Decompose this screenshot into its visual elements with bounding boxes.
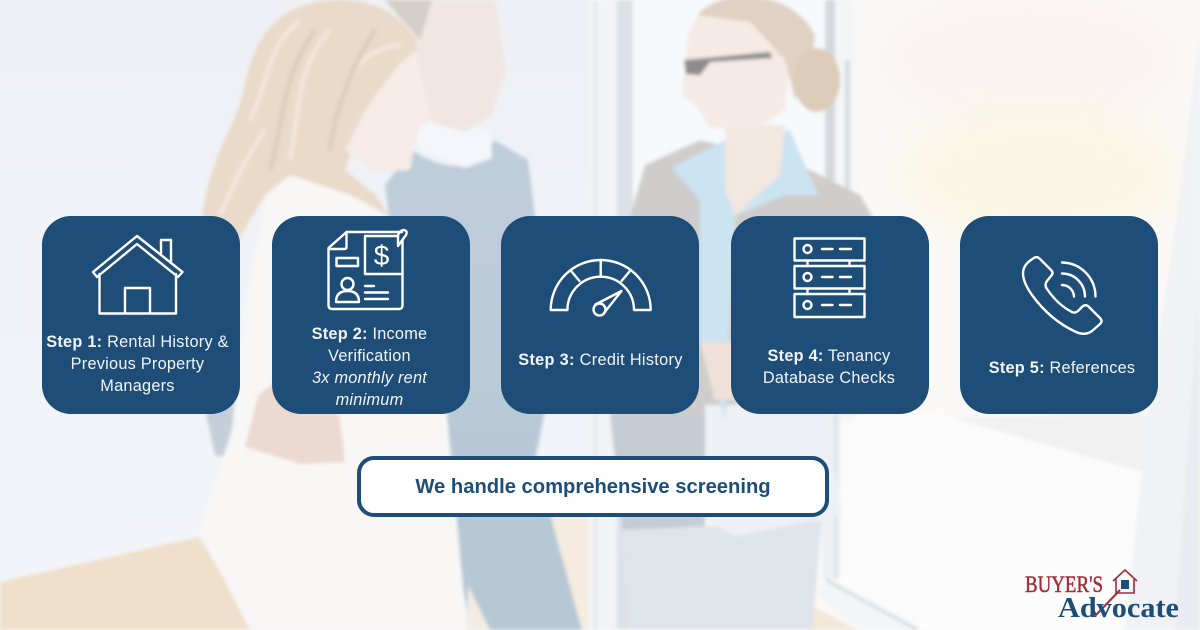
logo window and check: [1091, 580, 1129, 615]
icon: credit gauge: [550, 258, 652, 317]
card: step 5: [960, 216, 1158, 414]
icon: telephone: [1022, 256, 1103, 335]
step 3 label: Step 3: Credit History: [518, 351, 683, 369]
card: step 1: [42, 216, 240, 414]
step 5 label: Step 5: References: [989, 359, 1135, 377]
card: step 3: [501, 216, 699, 414]
man: [385, 140, 545, 470]
icon: house: [92, 234, 184, 315]
floor and balcony: [0, 537, 255, 630]
icon: database server: [793, 237, 866, 318]
step 1 label: Previous Property: [71, 355, 204, 373]
step 4 label: [763, 347, 895, 387]
step 1 label: Managers: [100, 377, 175, 395]
agent: [610, 140, 872, 420]
step 1 label: Step 1: Rental History &: [46, 333, 229, 351]
logo house mark: [1113, 570, 1137, 593]
card: step 2: [272, 216, 470, 414]
icon: income document: [327, 228, 408, 310]
step 2 label: Step 2: Income: [312, 325, 427, 343]
logo: Buyer's Advocate: [1025, 569, 1179, 620]
step 4 label: Database Checks: [763, 369, 895, 387]
callout: [357, 456, 829, 517]
step 1 label: [46, 333, 229, 395]
step 2 label: [312, 325, 428, 409]
step 2 label: minimum: [336, 391, 403, 409]
step 2 label: Verification: [328, 347, 411, 365]
step 4 label: Step 4: Tenancy: [768, 347, 890, 365]
dollar sign: $: [374, 240, 390, 271]
step 2 label: 3x monthly rent: [312, 369, 427, 387]
card: step 4: [731, 216, 929, 414]
callout: We handle comprehensive screening: [415, 476, 771, 498]
woman: [199, 177, 467, 630]
door and window frames: [588, 0, 618, 630]
logo wordmark: Buyer's: BUYER'S: [1025, 572, 1103, 597]
